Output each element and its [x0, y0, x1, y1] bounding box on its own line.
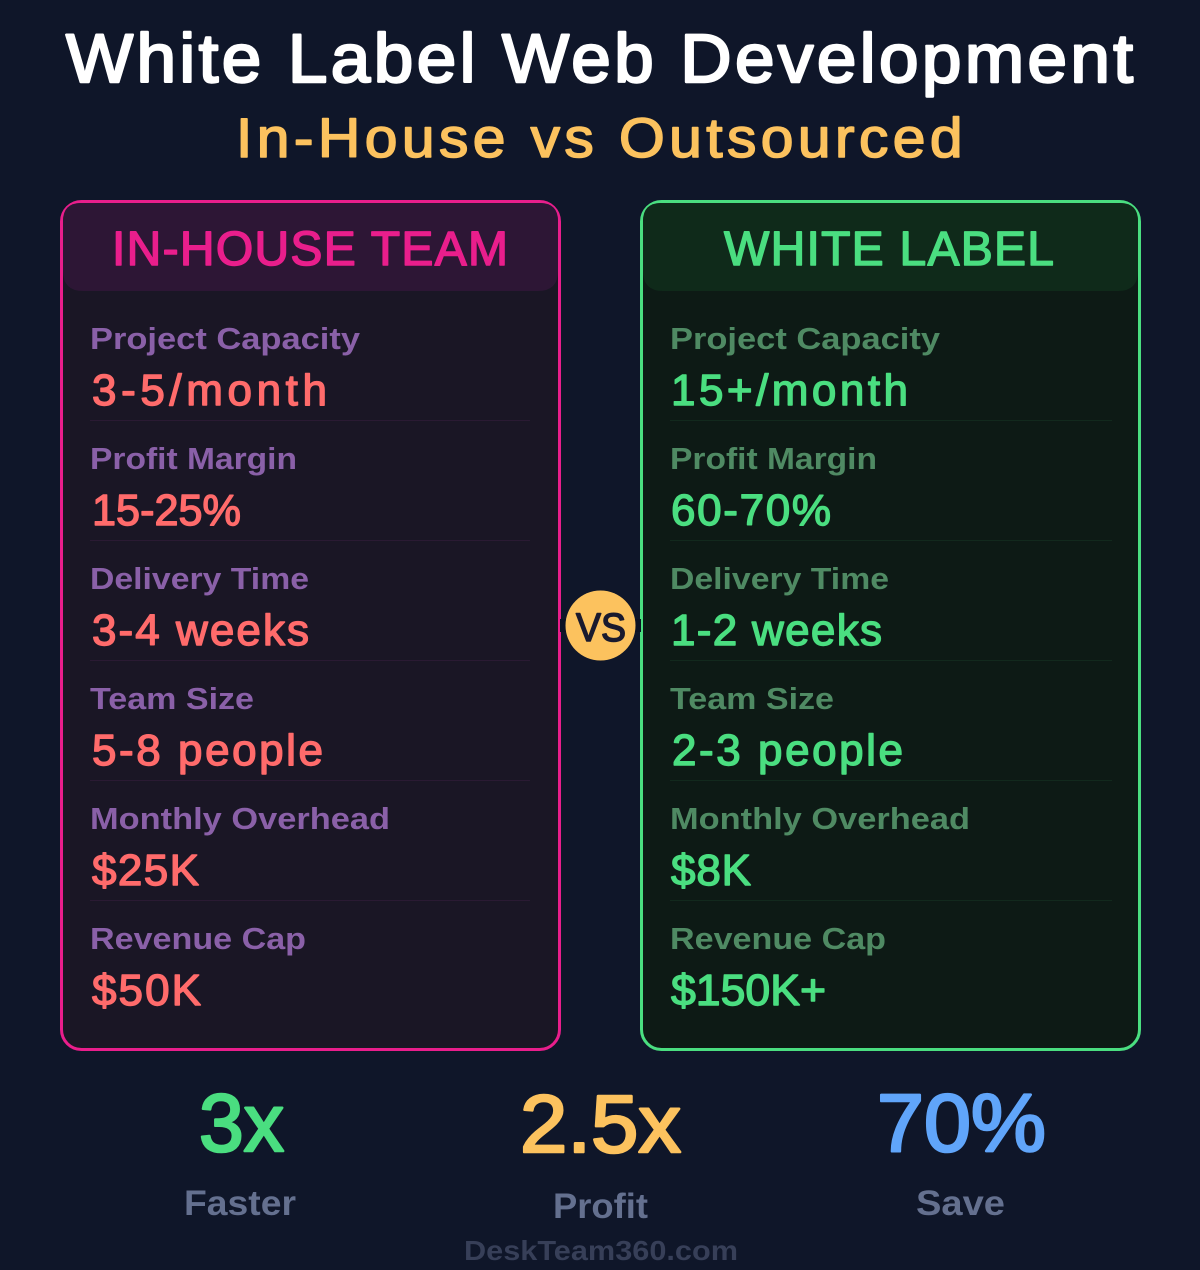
panel header band: [63, 203, 558, 291]
vs badge: [560, 590, 641, 660]
row: team size: [670, 681, 1112, 781]
row: revenue cap: $50K: [92, 966, 201, 1015]
row: delivery time: 3-4 weeks: [92, 606, 309, 655]
panel: white label: [642, 202, 1140, 1050]
row: delivery time: 1-2 weeks: [671, 606, 882, 655]
row: revenue cap: Revenue Cap: [670, 921, 886, 956]
row: delivery time: Delivery Time: [90, 561, 309, 596]
stat: faster: [184, 1078, 296, 1223]
stat: profit: [520, 1079, 681, 1226]
row: team size: 5-8 people: [92, 726, 323, 775]
row: delivery time: [90, 561, 530, 661]
panel card: [62, 202, 560, 1050]
stat: faster: Faster: [184, 1184, 296, 1223]
panel heading: IN-HOUSE TEAM: [112, 223, 508, 276]
stat: save: 70%: [877, 1078, 1046, 1169]
row: project capacity: [90, 321, 530, 421]
panel header band: [643, 203, 1138, 291]
panel card: [642, 202, 1140, 1050]
row: project capacity: Project Capacity: [670, 321, 941, 356]
row: monthly overhead: Monthly Overhead: [90, 801, 390, 836]
row: revenue cap: [90, 921, 306, 1015]
row: monthly overhead: [90, 801, 530, 901]
row: project capacity: 3-5/month: [92, 366, 327, 415]
subtitle: In-House vs Outsourced: [236, 107, 963, 170]
stat: profit: Profit: [553, 1187, 648, 1226]
row: profit margin: Profit Margin: [670, 441, 877, 476]
row: team size: Team Size: [90, 681, 254, 716]
row: monthly overhead: Monthly Overhead: [670, 801, 970, 836]
row: profit margin: 60-70%: [671, 486, 831, 535]
row: profit margin: [90, 441, 530, 541]
row: project capacity: Project Capacity: [90, 321, 361, 356]
row: project capacity: 15+/month: [671, 366, 908, 415]
row: monthly overhead: [670, 801, 1112, 901]
panel: in-house team: [62, 202, 560, 1050]
row: revenue cap: [670, 921, 886, 1015]
row: team size: 2-3 people: [672, 726, 903, 775]
row: project capacity: [670, 321, 1112, 421]
row: profit margin: Profit Margin: [90, 441, 297, 476]
stat: save: [877, 1078, 1046, 1223]
panel heading: WHITE LABEL: [724, 223, 1054, 276]
title: White Label Web Development: [66, 20, 1133, 97]
row: profit margin: [670, 441, 1112, 541]
stat: faster: 3x: [199, 1078, 284, 1169]
row: delivery time: Delivery Time: [670, 561, 889, 596]
row: monthly overhead: $25K: [92, 846, 199, 895]
row: monthly overhead: $8K: [671, 846, 751, 895]
vs badge: VS: [576, 606, 626, 650]
row: team size: [90, 681, 530, 781]
row: revenue cap: $150K+: [671, 966, 826, 1015]
stat: profit: 2.5x: [520, 1079, 681, 1170]
row: revenue cap: Revenue Cap: [90, 921, 306, 956]
row: delivery time: [670, 561, 1112, 661]
row: profit margin: 15-25%: [92, 486, 241, 535]
footer: DeskTeam360.com: [464, 1235, 738, 1266]
stat: save: Save: [916, 1184, 1005, 1223]
row: team size: Team Size: [670, 681, 834, 716]
